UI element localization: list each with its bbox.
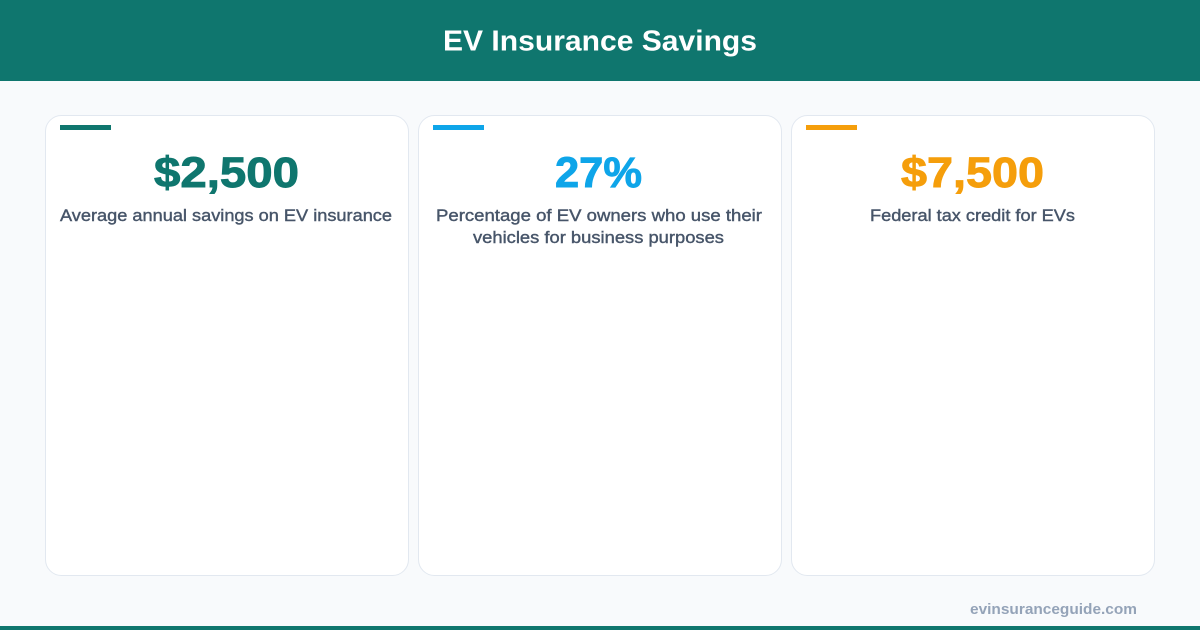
accent bar: amber <box>806 125 857 130</box>
panel: business use <box>418 116 782 576</box>
title: EV Insurance Savings <box>443 26 757 58</box>
description: business use: Percentage of EV owners who use their <box>436 206 762 225</box>
source website: evinsuranceguide.com <box>970 601 1137 618</box>
panel: federal tax credit <box>792 116 1154 576</box>
description: business use: vehicles for business purposes <box>473 228 724 247</box>
description: tax credit: Federal tax credit for EVs <box>870 206 1075 225</box>
accent bar: teal <box>60 125 111 130</box>
stat: 27%: 27% <box>555 149 642 197</box>
panel: average annual savings <box>46 116 408 576</box>
accent bar: blue <box>433 125 484 130</box>
description: annual savings: Average annual savings on EV insurance <box>60 206 392 225</box>
footer bar <box>0 626 1200 630</box>
header banner <box>0 0 1200 81</box>
stat: $7,500: $7,500 <box>901 149 1044 197</box>
stat: $2,500: $2,500 <box>154 149 299 197</box>
description: business use <box>436 206 762 247</box>
